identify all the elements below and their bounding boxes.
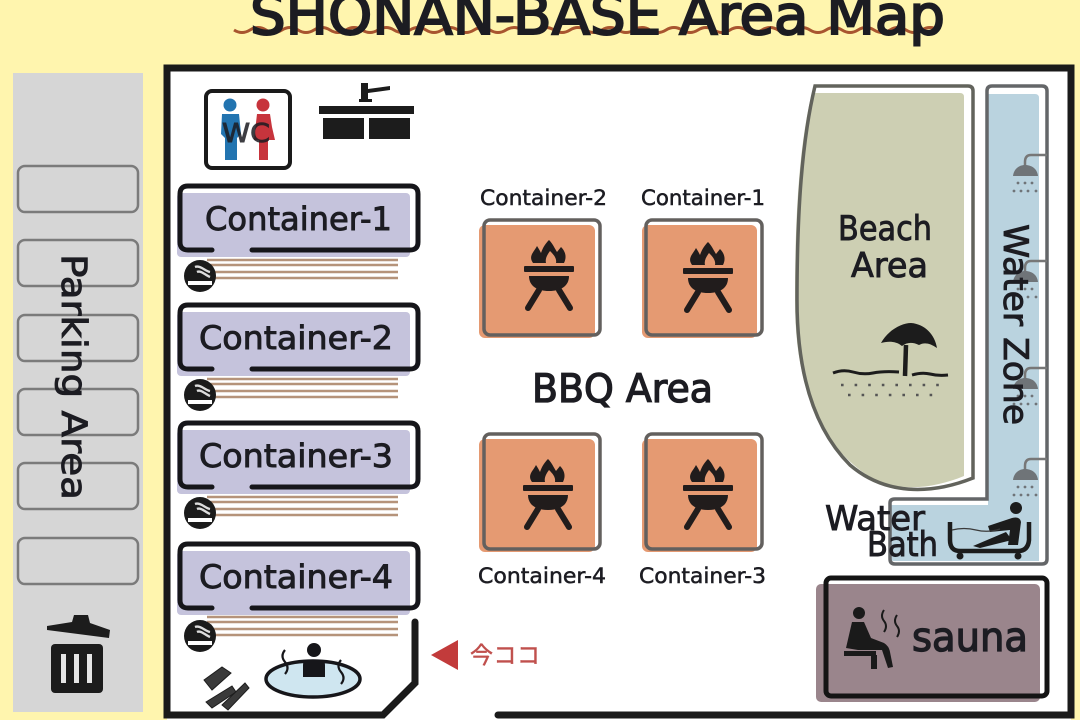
- panel: container 3: [177, 423, 418, 529]
- icon: shower 4: [1013, 459, 1047, 496]
- label: water bath: Bath: [867, 525, 938, 565]
- deck: [207, 617, 398, 635]
- panel: water zone: [825, 86, 1047, 565]
- panel: parking area: [13, 73, 143, 712]
- icon: grill: [523, 459, 573, 527]
- icon: shower 1: [1013, 155, 1047, 192]
- icon: bath: [950, 502, 1029, 560]
- icon: shower 2: [1013, 261, 1047, 298]
- icon: firewood: [204, 667, 249, 710]
- label: Container-1: [641, 186, 765, 210]
- label: Container-2: [199, 319, 393, 357]
- icon: grill: [683, 459, 733, 527]
- icon: smoking area: [184, 379, 216, 411]
- label: water bath: [825, 499, 938, 565]
- icon: trash can: [47, 615, 110, 693]
- icon: shower 3: [1013, 368, 1047, 405]
- panel: BBQ site Container-1: [641, 186, 765, 338]
- label: sauna: [912, 615, 1028, 661]
- panel: BBQ site Container-2: [479, 186, 607, 338]
- icon: WC: WC: [222, 119, 270, 149]
- panel: BBQ site Container-4: [478, 434, 606, 588]
- icon: sauna person: [844, 607, 899, 669]
- icon: beach umbrella: [833, 323, 948, 395]
- deck: [207, 260, 398, 278]
- panel: container 4: [177, 544, 418, 652]
- panel: sauna: [816, 578, 1047, 702]
- panel: beach area: [795, 86, 973, 489]
- panel: container 2: [177, 305, 418, 411]
- icon: hot spring: [266, 643, 360, 697]
- panel: BBQ site Container-3: [639, 434, 766, 588]
- label: Beach: [838, 209, 932, 249]
- icon: smoking area: [184, 620, 216, 652]
- label: Water Zone: [995, 224, 1035, 425]
- icon: smoking area: [184, 260, 216, 292]
- current location label: 今ココ: [470, 642, 540, 668]
- icon: smoking area: [184, 497, 216, 529]
- icon: WC: [206, 91, 290, 168]
- arrow: current location: [431, 640, 458, 670]
- panel: container 1: [177, 186, 418, 292]
- icon: grill: [683, 242, 733, 310]
- heading: BBQ Area: BBQ Area: [532, 367, 713, 412]
- icon: sink: [319, 83, 414, 139]
- icon: grill: [524, 240, 574, 308]
- label: Area: [851, 246, 928, 286]
- label: Container-1: [205, 200, 392, 238]
- deck: [207, 379, 398, 397]
- label: Container-3: [199, 437, 393, 475]
- label: water bath: Water: [825, 499, 925, 539]
- label: Container-4: [199, 558, 393, 596]
- panel: main site: [167, 68, 1071, 720]
- label: Container-2: [480, 186, 607, 210]
- label: Container-3: [639, 564, 766, 588]
- label: Container-4: [478, 564, 606, 588]
- deck: [207, 497, 398, 515]
- parking slots: [18, 166, 138, 584]
- parking label: Parking Area: [53, 254, 93, 500]
